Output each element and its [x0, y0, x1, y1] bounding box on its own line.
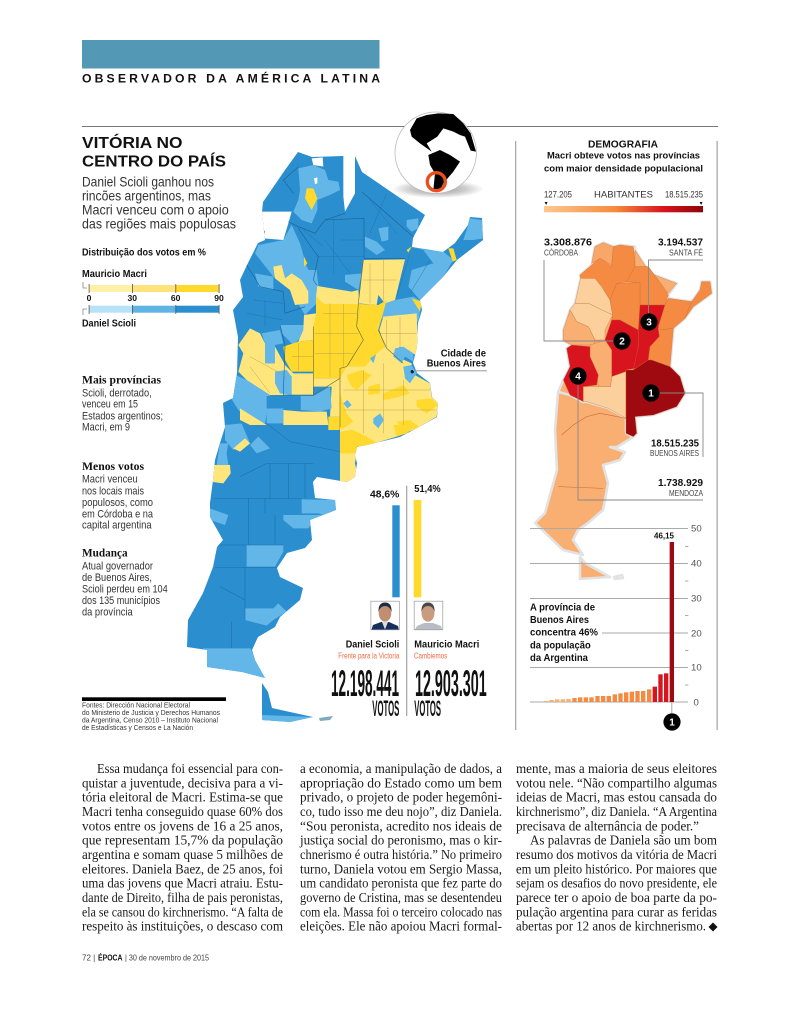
header color bar — [82, 40, 380, 68]
article column 1: argentina e somam quase 5 milhões de — [82, 847, 283, 862]
Macri totals: Cambiemos — [414, 652, 447, 661]
Catamarca — [575, 278, 613, 315]
note: Mais províncias — [82, 372, 163, 433]
marker 2: 2 — [619, 337, 625, 348]
article column 1: votos entre os jovens de 16 a 25 anos, — [82, 818, 283, 833]
axis labels: 10 — [691, 663, 702, 674]
article column 2: co, tudo isso me deu nojo”, diz Daniela. — [300, 804, 502, 819]
leader lines — [544, 260, 703, 500]
Tierra del Fuego — [262, 683, 313, 722]
Buenos Aires city callout: Cidade de — [441, 348, 486, 360]
Patagonia province borders — [558, 413, 626, 488]
article column 2: apropriação do Estado como um bem — [300, 775, 502, 790]
vote legend: 0 — [87, 293, 92, 303]
vote legend: 30 — [128, 293, 137, 303]
province labels: BUENOS AIRES — [650, 448, 699, 458]
province labels: 3.308.876 — [544, 237, 592, 249]
population scale: 18.515.235 — [665, 190, 703, 200]
vote legend: 60 — [171, 293, 181, 303]
article column 3: abertas por 12 anos de kirchnerismo. — [516, 919, 706, 934]
axis labels: 40 — [691, 559, 702, 570]
vote legend: Daniel Scioli — [82, 319, 136, 330]
article column 1 — [82, 761, 283, 934]
yellow areas — [283, 188, 457, 430]
axis labels: 30 — [691, 594, 702, 605]
sources — [82, 697, 226, 732]
note: Mudança: Scioli perdeu em 104 — [82, 583, 168, 595]
article column 3: resumo dos motivos da vitória de Macri — [516, 847, 717, 862]
marker 1 — [663, 713, 681, 731]
article column 3: votou nele. “Não compartilho algumas — [516, 775, 717, 790]
province labels: MENDOZA — [669, 488, 703, 498]
chart callout: da população — [530, 639, 591, 651]
article column 1: quistar a juventude, decisiva para a vi- — [82, 775, 283, 790]
Jujuy — [592, 243, 613, 265]
province labels: 1.738.929 — [658, 477, 703, 489]
north light blue — [230, 165, 483, 423]
province labels: 18.515.235 — [651, 437, 699, 449]
demography heading — [544, 139, 703, 174]
sources: Fontes: Dirección Nacional Electoral — [82, 701, 190, 710]
article column 2: eleições. Ele não apoiou Macri formal- — [300, 919, 502, 934]
article column 3: mente, mas a maioria de seus eleitores — [516, 761, 717, 776]
axis labels: 50 — [691, 524, 702, 535]
candidate vote comparison: 12.198.441 — [331, 663, 399, 704]
article column 3: kirchnerismo”, diz Daniela. “A Argentina — [516, 804, 717, 819]
article column 2: privado, o projeto de poder hegemôni- — [300, 790, 502, 805]
bars — [544, 542, 674, 702]
Scioli totals: Daniel Scioli — [346, 639, 399, 651]
subheading: das regiões mais populosas — [82, 216, 236, 231]
candidate vote comparison: VOTOS — [372, 696, 399, 721]
chart callout: da Argentina — [530, 652, 588, 664]
note: Mudança — [82, 546, 168, 618]
Santa Fe — [633, 305, 665, 370]
article column 2: a economia, a manipulação de dados, a — [300, 761, 502, 776]
Misiones — [685, 282, 712, 318]
Scioli totals — [331, 639, 400, 721]
Santiago del Estero — [610, 283, 640, 330]
Macri bar: 51,4% — [414, 483, 441, 495]
small islands — [319, 716, 333, 721]
axis labels: 0 — [694, 697, 699, 708]
marker 1 — [642, 384, 660, 402]
globe locator — [392, 112, 484, 198]
note: Mais províncias: Scioli, derrotado, — [82, 388, 152, 400]
article column 2 — [299, 761, 502, 934]
note: Menos votos: em Córdoba e na — [82, 508, 154, 520]
headline: VITÓRIA NO — [82, 133, 182, 152]
demography heading: DEMOGRAFIA — [588, 139, 658, 151]
Scioli bar — [370, 489, 400, 597]
note: Menos votos: populosos, como — [82, 497, 153, 509]
Macri bar — [414, 483, 441, 597]
San Luis — [590, 340, 612, 387]
page footer — [82, 954, 209, 963]
article column 1: Essa mudança foi essencial para con- — [97, 761, 283, 776]
Scioli bar: 48,6% — [370, 489, 400, 501]
province labels: 3.194.537 — [658, 237, 703, 249]
subheading: Daniel Scioli ganhou nos — [82, 175, 214, 190]
article column 3 — [516, 761, 718, 934]
Chaco — [627, 267, 668, 305]
note: Mais províncias: Mais províncias — [82, 372, 161, 386]
text: 12.903.301 — [415, 663, 487, 704]
province borders — [247, 167, 415, 395]
sources: de Estadísticas y Censos e La Nación — [82, 723, 193, 732]
Buenos Aires — [626, 360, 685, 437]
subheading — [82, 175, 236, 231]
article column 3: As palavras de Daniela são um bom — [530, 833, 717, 848]
article column 1: dante de Direito, filha de pais peronistas, — [82, 890, 283, 905]
marker 4 — [569, 367, 587, 385]
article column 1: que representam 15,7% da população — [82, 833, 283, 848]
sources: da Argentina, Censo 2010 – Instituto Nacional — [82, 716, 218, 725]
page footer: | 30 de novembro de 2015 — [125, 954, 209, 963]
note: Mais províncias: venceu em 15 — [82, 399, 138, 411]
axis labels: 20 — [691, 628, 702, 639]
article column 1: tória eleitoral de Macri. Estima-se que — [82, 790, 283, 805]
population share bar chart — [530, 524, 702, 731]
light yellow areas — [238, 259, 438, 447]
axis labels — [691, 524, 702, 708]
chart callout: Buenos Aires — [530, 614, 589, 626]
photo: Daniel Scioli — [371, 601, 399, 630]
photo: Mauricio Macri — [414, 601, 443, 630]
subheading: rincões argentinos, mas — [82, 189, 211, 204]
vote legend: Mauricio Macri — [82, 269, 147, 280]
Buenos Aires city callout — [413, 348, 487, 371]
article column 2: um candidato peronista que fez parte do — [300, 876, 502, 891]
La Pampa — [583, 368, 635, 418]
article column 2: “Sou peronista, acredito nos ideais de — [300, 818, 502, 833]
Entre Ríos — [648, 328, 673, 367]
article column 2: governo de Cristina, mas se desentendeu — [300, 890, 502, 905]
marker 1: 1 — [648, 389, 654, 400]
population scale: HABITANTES — [594, 190, 653, 201]
candidate vote comparison — [331, 483, 487, 721]
note: Menos votos: Menos votos — [82, 459, 144, 473]
marker 2 — [613, 332, 631, 350]
Buenos Aires city callout: Buenos Aires — [427, 358, 486, 370]
Macri totals: Mauricio Macri — [414, 639, 479, 651]
article column 3: pulação argentina para curar as feridas — [516, 904, 717, 919]
note: Menos votos: nos locais mais — [82, 485, 144, 497]
La Rioja — [570, 303, 613, 340]
marker 1: 1 — [669, 718, 675, 729]
article column 3: sejam os desafios do novo presidente, ele — [516, 876, 717, 891]
population scale — [544, 190, 703, 212]
page footer: 72 | — [82, 954, 95, 963]
article column 3: ideias de Macri, mas estou cansada do — [516, 790, 717, 805]
Macri totals: VOTOS — [414, 696, 441, 721]
note: Mudança: da província — [82, 606, 133, 618]
vote legend: 90 — [214, 293, 224, 303]
sources: do Ministerio de Justicia y Derechos Humanos — [82, 708, 220, 717]
note: Menos votos: capital argentina — [82, 520, 152, 532]
marker 4: 4 — [575, 372, 581, 383]
demography heading: com maior densidade populacional — [544, 163, 703, 174]
marker 3: 3 — [646, 318, 652, 329]
note: Menos votos: Macri venceu — [82, 474, 138, 486]
province labels — [544, 237, 703, 498]
article column 2: com ela. Massa foi o terceiro colocado nas — [300, 904, 502, 919]
demography heading: Macri obteve votos nas províncias — [547, 150, 700, 161]
vote legend — [82, 248, 224, 330]
article column 1: eleitores. Daniela Baez, de 25 anos, foi — [82, 861, 283, 876]
pockets and La Pampa — [267, 347, 417, 428]
population scale: 127.205 — [544, 190, 572, 200]
Macri totals — [414, 639, 487, 721]
article column 2: chnerismo é outra história.” No primeiro — [300, 847, 502, 862]
main election map — [180, 145, 490, 730]
note: Mais províncias: Macri, em 9 — [82, 421, 130, 433]
Formosa — [635, 250, 677, 293]
page footer: ÉPOCA — [98, 954, 123, 963]
vote legend: Distribuição dos votos em % — [82, 248, 206, 259]
article column 2: turno, Daniela votou em Sergio Massa, — [300, 861, 502, 876]
chart callout: A província de — [530, 602, 595, 614]
article column 1: Macri tenha conseguido quase 60% dos — [82, 804, 283, 819]
note: Menos votos — [82, 459, 154, 532]
article column 3: parece ter o apoio de boa parte da po- — [516, 890, 717, 905]
Mendoza — [563, 345, 598, 402]
subheading: Macri venceu com o apoio — [82, 202, 229, 217]
section title: OBSERVADOR DA AMÉRICA LATINA — [82, 70, 380, 85]
white no-data areas — [262, 156, 355, 240]
article column 3: em um pleito histórico. Por maiores que — [516, 861, 717, 876]
headline — [82, 133, 226, 171]
note: Mudança: de Buenos Aires, — [82, 572, 152, 584]
Salta — [580, 245, 635, 300]
article column 3: precisava de alternância de poder.” — [516, 818, 699, 833]
Corrientes — [658, 298, 692, 330]
southern regions — [203, 423, 338, 680]
note: Mudança: Mudança — [82, 546, 128, 560]
article column 2: justiça social do peronismo, mas o kir- — [299, 833, 502, 848]
headline: CENTRO DO PAÍS — [82, 152, 226, 171]
chart callout: concentra 46% — [530, 627, 599, 639]
population map — [535, 243, 712, 579]
article column 1: uma das jovens que Macri atraiu. Estu- — [82, 876, 283, 891]
article column 1: respeito às instituições, o descaso com — [82, 919, 283, 934]
marker 3 — [640, 313, 658, 331]
Córdoba — [605, 320, 638, 377]
Scioli totals: Frente para la Victoria — [338, 652, 400, 661]
note: Mudança: Atual governador — [82, 560, 153, 572]
province labels: SANTA FÉ — [669, 248, 703, 258]
note: Mudança: dos 135 municípios — [82, 595, 160, 607]
value label: 46,15 — [654, 530, 674, 540]
municipal lines — [247, 193, 430, 327]
chart callout — [530, 602, 599, 664]
province labels: CÓRDOBA — [544, 248, 578, 258]
San Juan — [563, 310, 595, 345]
note: Mais províncias: Estados argentinos; — [82, 410, 163, 422]
article column 1: ela se cansou do kirchnerismo. “A falta de — [82, 904, 283, 919]
